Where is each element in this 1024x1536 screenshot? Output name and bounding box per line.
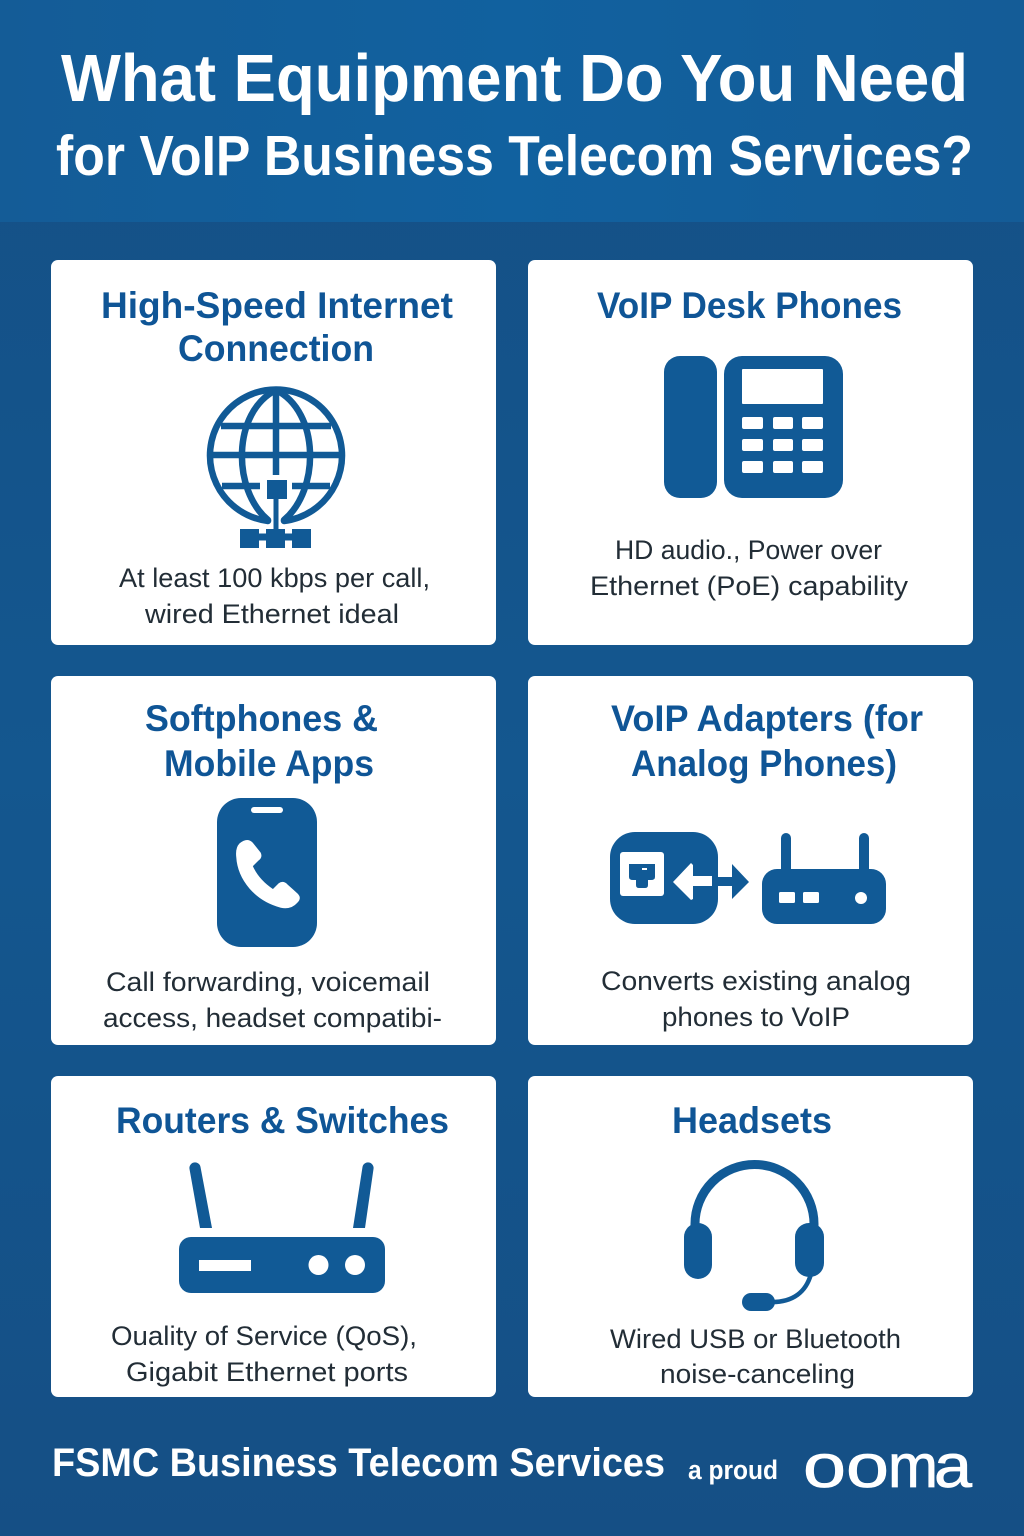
logo: ooma: a [934,1432,972,1500]
title banner: What Equipment Do You Need [61,41,968,116]
footer company name: FSMC Business Telecom Services [52,1441,665,1485]
heading: softphones and mobile apps: Mobile Apps [164,743,374,784]
description: desk phones: Ethernet (PoE) capability [590,571,909,601]
description: adapters: Converts existing analog [601,966,911,996]
panel: voip desk phones [528,260,973,645]
heading: voip adapters: Analog Phones) [631,743,897,784]
description: softphones: Call forwarding, voicemail [106,967,430,997]
description: internet: wired Ethernet ideal [144,599,399,629]
icon: globe with network nodes [210,389,342,548]
description: softphones [103,967,442,1033]
panel: high-speed internet connection [51,260,496,645]
description: routers: Gigabit Ethernet ports [126,1357,408,1387]
heading: softphones and mobile apps [145,698,378,784]
description: internet: At least 100 kbps per call, [119,563,430,593]
heading: high-speed internet: Connection [178,328,374,369]
heading: routers and switches: Routers & Switches [116,1100,449,1141]
description: internet [119,563,430,629]
heading: headsets: Headsets [672,1100,832,1141]
description: routers: Ouality of Service (QoS), [111,1321,417,1351]
description: softphones: access, headset compatibi- [103,1003,442,1033]
panel: headsets [528,1076,973,1397]
panel: softphones and mobile apps [51,676,496,1045]
description: headsets: noise-canceling [660,1359,855,1389]
panel: voip adapters [528,676,973,1045]
logo: ooma: oo [803,1432,889,1500]
panel: routers and switches [51,1076,496,1397]
description: adapters [601,966,911,1032]
heading: voip adapters [611,698,923,784]
title banner [0,0,1024,222]
description: desk phones: HD audio., Power over [615,535,882,565]
icon: router [179,1162,385,1293]
description: routers [111,1321,417,1387]
heading: voip desk phones: VoIP Desk Phones [597,285,902,326]
description: adapters: phones to VoIP [662,1002,850,1032]
description: headsets: Wired USB or Bluetooth [610,1324,901,1354]
footer tagline: a proud [688,1455,778,1485]
heading: softphones and mobile apps: Softphones & [145,698,378,739]
icon: headset with microphone [684,1165,824,1311]
description: headsets [610,1324,901,1389]
description: desk phones [590,535,909,601]
heading: high-speed internet [101,285,453,369]
heading: voip adapters: VoIP Adapters (for [611,698,923,739]
heading: high-speed internet: High-Speed Internet [101,285,453,326]
logo: ooma: m [888,1432,938,1500]
footer: brand line [52,1432,972,1500]
icon: desk phone [664,356,843,498]
icon: adapter connected to router [610,832,886,924]
icon: smartphone with handset [217,798,317,947]
